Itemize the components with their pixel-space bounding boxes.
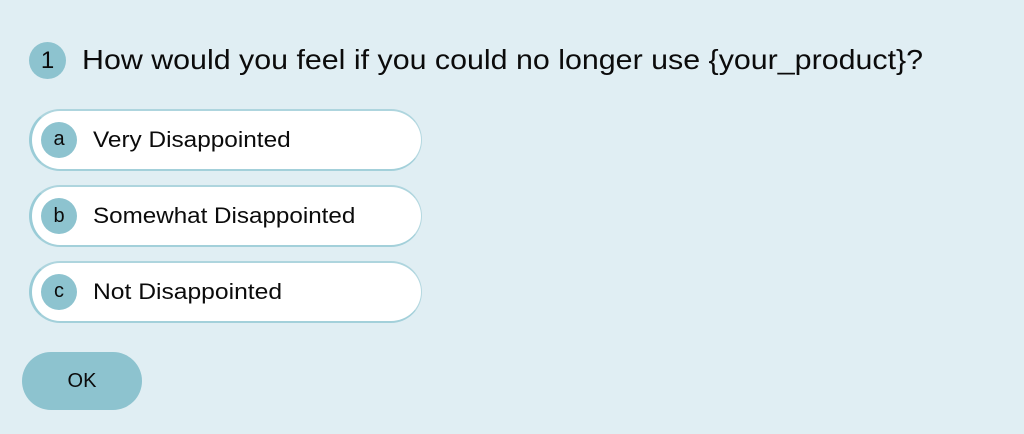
option a label: Very Disappointed (93, 126, 291, 152)
option a (29, 109, 422, 171)
option c (29, 261, 422, 323)
option b (29, 185, 422, 247)
question number badge: 1 (41, 47, 54, 74)
question number badge (29, 42, 66, 79)
question heading (29, 42, 923, 79)
option a badge: a (53, 128, 65, 150)
question text: How would you feel if you could no longer use {your_product}? (82, 44, 923, 75)
option b badge (41, 198, 77, 234)
option b label: Somewhat Disappointed (93, 202, 355, 228)
option c badge (41, 274, 77, 310)
option c label: Not Disappointed (93, 278, 282, 304)
option c badge: c (54, 280, 64, 302)
OK button (22, 352, 142, 410)
OK button: OK (68, 370, 96, 392)
option a badge (41, 122, 77, 158)
option b badge: b (53, 204, 65, 226)
